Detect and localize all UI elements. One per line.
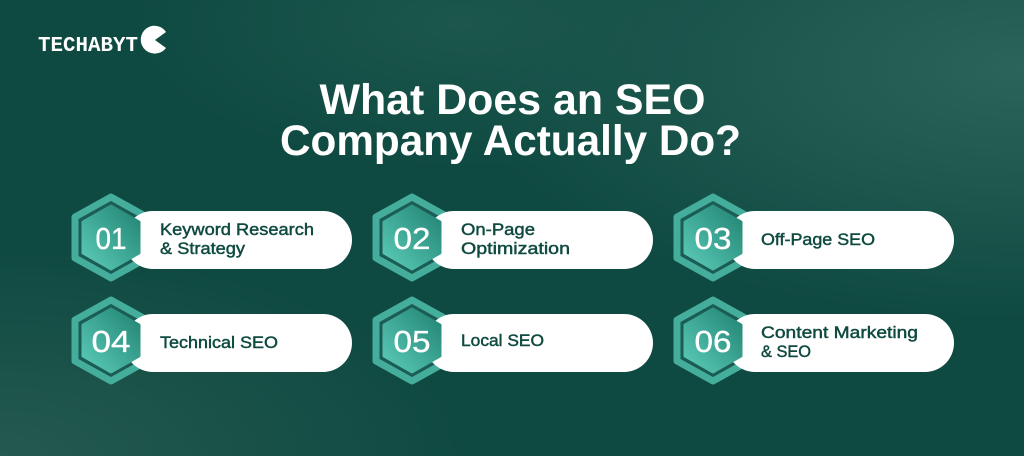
title — [280, 76, 741, 165]
pill — [726, 211, 954, 269]
logo: Techabyte — [38, 26, 166, 58]
hexagon badge: 03 — [694, 221, 732, 256]
card 01: Keyword Research & Strategy — [75, 197, 352, 278]
hexagon outer ring — [75, 197, 147, 278]
hexagon badge — [685, 206, 741, 269]
hexagon outer ring — [376, 300, 448, 381]
hexagon badge: 05 — [394, 324, 430, 359]
label: & SEO — [761, 343, 811, 361]
hexagon outer ring — [677, 197, 749, 278]
hexagon badge: 06 — [694, 324, 732, 359]
label: Local SEO — [461, 332, 544, 350]
card 02: On-Page Optimization — [376, 197, 653, 278]
label: Technical SEO — [160, 334, 278, 352]
hexagon badge: 02 — [394, 221, 430, 256]
logo: Techabyte: TECHABYT — [38, 35, 138, 58]
hexagon badge: 01 — [96, 221, 126, 256]
title: Company Actually Do? — [280, 117, 741, 165]
label: On-Page — [461, 221, 535, 239]
hexagon outer ring — [75, 300, 147, 381]
card 04: Technical SEO — [75, 300, 352, 381]
card 06: Content Marketing & SEO — [677, 300, 954, 381]
card 03: Off-Page SEO — [677, 197, 954, 278]
label: & Strategy — [160, 240, 246, 258]
label: Off-Page SEO — [761, 231, 875, 249]
hexagon outer ring — [376, 197, 448, 278]
title: What Does an SEO — [320, 76, 706, 124]
pill — [425, 314, 653, 372]
label: Content Marketing — [761, 324, 918, 342]
hexagon badge — [83, 206, 139, 269]
hexagon badge — [384, 309, 440, 372]
hexagon badge — [685, 309, 741, 372]
card 05: Local SEO — [376, 300, 653, 381]
label: Keyword Research — [160, 221, 314, 239]
pill — [726, 314, 954, 372]
icon: logo pac-man E — [141, 26, 166, 54]
pill — [124, 211, 352, 269]
hexagon outer ring — [677, 300, 749, 381]
hexagon badge — [83, 309, 139, 372]
hexagon badge — [384, 206, 440, 269]
label: Optimization — [461, 240, 570, 258]
pill — [425, 211, 653, 269]
hexagon badge: 04 — [92, 324, 130, 359]
pill — [124, 314, 352, 372]
